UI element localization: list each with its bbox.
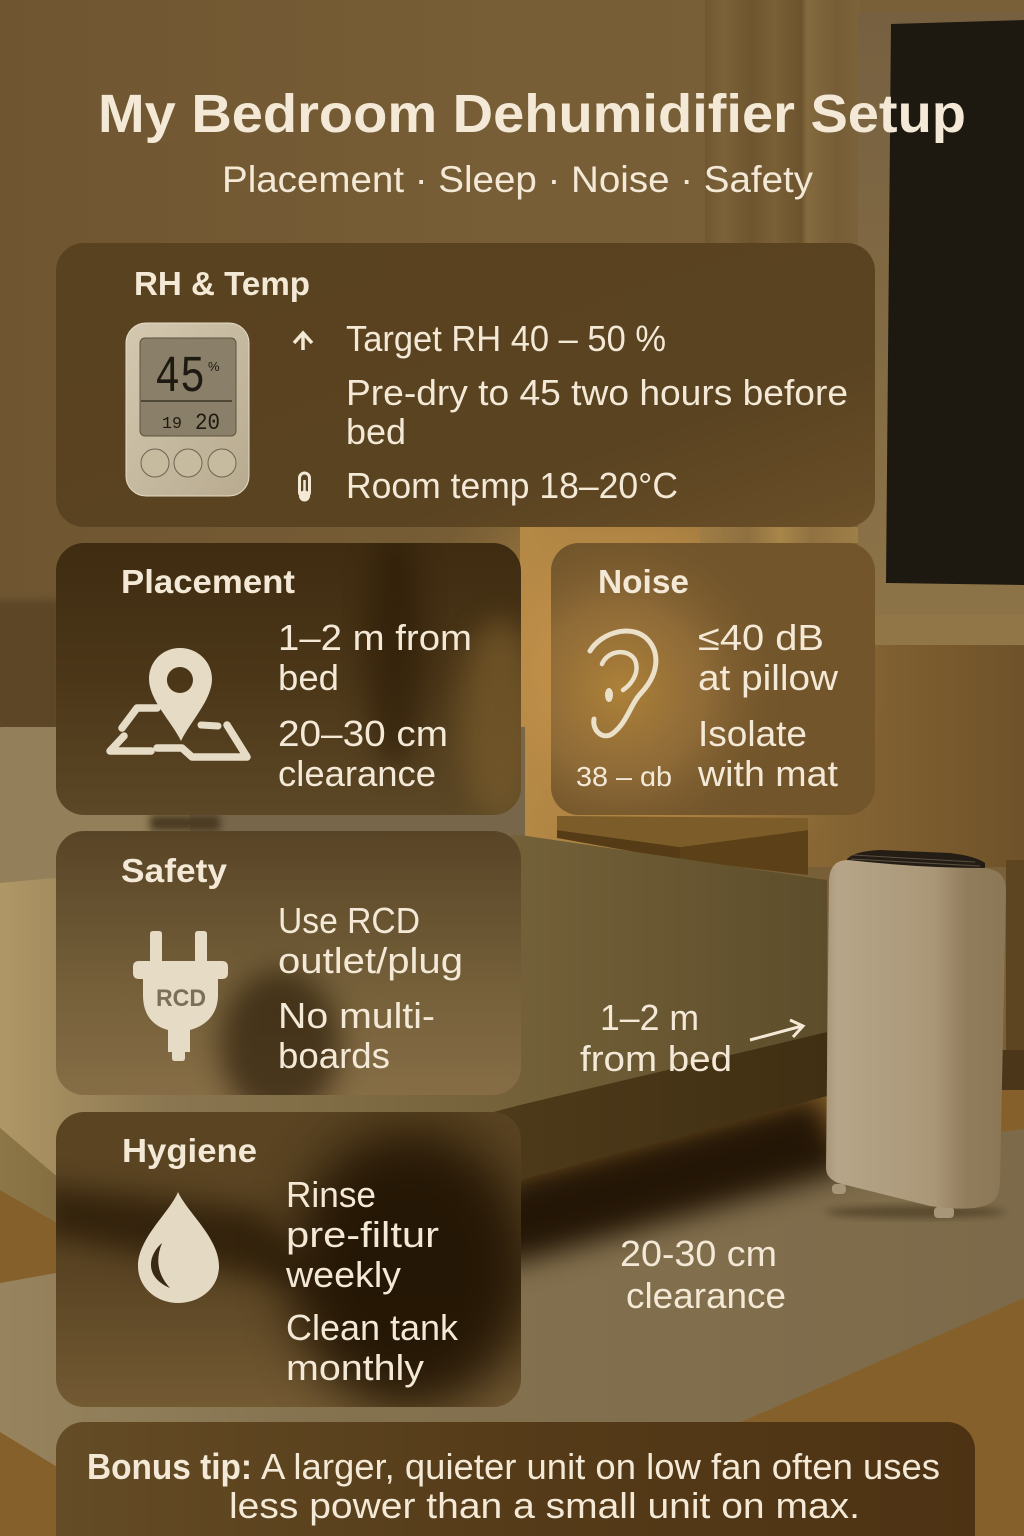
label: 38 dB: 38 – ɑb [576, 761, 672, 792]
heading: Safety: Safety [121, 852, 228, 889]
heading: Hygiene: Hygiene [122, 1132, 257, 1169]
panel: bonus tip [56, 1422, 975, 1536]
text: RH targets: Target RH 40 – 50 % [346, 318, 666, 359]
text: hygiene: pre-filtur [286, 1214, 439, 1255]
text: placement [278, 617, 472, 794]
icon: thermo-hygrometer: 19 [162, 415, 182, 434]
text: placement: clearance [278, 753, 436, 794]
subtitle: Placement · Sleep · Noise · Safety [222, 159, 814, 200]
text: bonus tip [87, 1446, 940, 1526]
bed [0, 835, 827, 1190]
dehumidifier unit [825, 850, 1006, 1218]
text: noise: ≤40 dB [698, 617, 824, 658]
callout: clearance [620, 1233, 786, 1316]
callout: clearance: 20-30 cm [620, 1233, 777, 1274]
text: hygiene: Clean tank [286, 1307, 459, 1348]
arrow: toward unit [750, 1020, 803, 1040]
text: placement: bed [278, 657, 339, 698]
text: safety [278, 900, 463, 1076]
icon: thermo-hygrometer: % [208, 359, 220, 374]
icon: thermometer [299, 473, 310, 502]
heading: Placement: Placement [121, 563, 295, 600]
text: RH targets [346, 318, 848, 506]
icon: ear [590, 631, 656, 736]
floor [0, 1090, 1024, 1536]
text: noise: with mat [697, 753, 838, 794]
text: RH targets: Room temp 18–20°C [346, 465, 678, 506]
title: My Bedroom Dehumidifier Setup [98, 84, 966, 144]
text: hygiene [285, 1174, 459, 1388]
panel: noise [551, 543, 875, 815]
callout: distance from bed: 1–2 m [600, 997, 699, 1038]
text: placement: 20–30 cm [278, 713, 448, 754]
text: bonus tip: Bonus tip: [87, 1446, 252, 1487]
text: noise [697, 617, 839, 794]
icon: RCD plug [133, 931, 228, 1061]
headboard cushion [0, 727, 525, 897]
text: RH targets: Pre-dry to 45 two hours before [346, 372, 848, 413]
text: RH targets: bed [346, 411, 406, 452]
text: noise: at pillow [698, 657, 839, 698]
text: safety: boards [278, 1035, 390, 1076]
heading: Noise: Noise [598, 563, 689, 600]
nightstand [557, 816, 808, 875]
callout: distance from bed [580, 997, 803, 1079]
callout: clearance: clearance [626, 1275, 786, 1316]
icon: water drop [138, 1192, 219, 1303]
panel: RH and temp [56, 243, 875, 527]
panel: hygiene [40, 1112, 530, 1410]
text: bonus tip: A larger, quieter unit on low fan often uses [261, 1446, 940, 1487]
icon: RCD plug: RCD [156, 985, 206, 1012]
icon: thermo-hygrometer: 20 [195, 410, 220, 436]
text: hygiene: monthly [286, 1347, 424, 1388]
heading: RH and Temp: RH & Temp [134, 265, 310, 302]
text: noise: Isolate [698, 713, 807, 754]
text: placement: 1–2 m from [278, 617, 472, 658]
text: hygiene: weekly [285, 1254, 401, 1295]
text: bonus tip: less power than a small unit on max. [229, 1485, 860, 1526]
icon: map pin [110, 648, 247, 757]
callout: distance from bed: from bed [580, 1038, 732, 1079]
panel: safety [56, 831, 521, 1120]
icon: thermo-hygrometer: 45 [155, 348, 205, 407]
icon: up arrow [294, 333, 312, 350]
panel: placement [56, 530, 540, 820]
text: safety: Use RCD [278, 900, 420, 941]
text: safety: outlet/plug [278, 940, 463, 981]
text: hygiene: Rinse [286, 1174, 376, 1215]
text: safety: No multi- [278, 995, 435, 1036]
icon: thermo-hygrometer [126, 323, 249, 496]
